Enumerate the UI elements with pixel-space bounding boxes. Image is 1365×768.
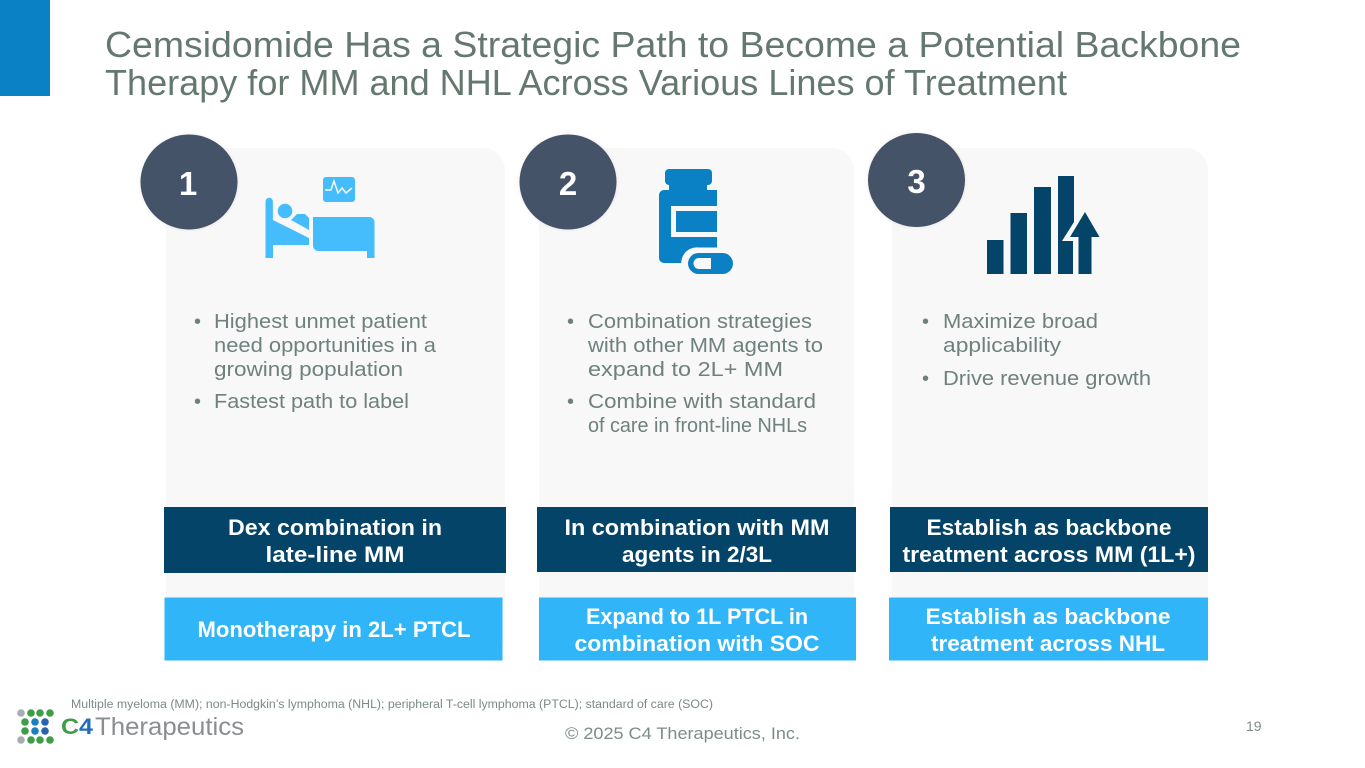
bullet text 1: • [194, 311, 201, 333]
bullet text 3: applicability [943, 335, 1061, 357]
bullet text 1: • [194, 391, 201, 413]
dark band 3: Establish as backbone [926, 515, 1172, 540]
number badge 1: 1 [179, 165, 197, 202]
dark band 3 [890, 507, 1208, 572]
logo: C4 Therapeutics [17, 709, 244, 744]
page number: 19 [1246, 718, 1262, 734]
bullet text 1 [194, 311, 437, 413]
dark band 3: treatment across MM (1L+) [902, 542, 1196, 567]
bullet text 3: Maximize broad [943, 311, 1098, 333]
bullet text 3 [922, 311, 1151, 390]
light band 2: combination with SOC [574, 631, 820, 656]
light band 2 [539, 598, 856, 660]
corner accent block [0, 0, 50, 96]
number badge 2: 2 [559, 165, 577, 202]
bullet text 1: growing population [214, 359, 403, 381]
icon: pill bottle [659, 169, 738, 282]
title: Cemsidomide Has a Strategic Path to Become a Potential Backbone [105, 24, 1241, 65]
number badge 2 [520, 134, 616, 230]
bullet text 1: need opportunities in a [214, 335, 437, 357]
dark band 2 [537, 507, 856, 572]
copyright: © 2025 C4 Therapeutics, Inc. [565, 725, 800, 743]
bullet text 2: Combine with standard [588, 391, 816, 413]
dark band 2: In combination with MM [564, 515, 830, 540]
panel: column 2 [520, 134, 856, 660]
logo wordmark: Therapeutics [95, 713, 244, 741]
dark band 1: late-line MM [266, 542, 404, 567]
bullet text 2: of care in front-line NHLs [588, 415, 807, 437]
light band 1: Monotherapy in 2L+ PTCL [198, 617, 471, 642]
icon: patient in bed with monitor [266, 177, 374, 258]
logo wordmark: C4 [61, 714, 94, 739]
panel: column 3 [868, 133, 1208, 660]
icon: rising bars with arrow [987, 176, 1100, 274]
title [105, 24, 1241, 103]
dark band 1 [164, 507, 506, 573]
panel background 1 [166, 148, 505, 660]
bullet text 2: Combination strategies [588, 311, 812, 333]
dark band 1: Dex combination in [228, 515, 442, 540]
bullet text 1: Highest unmet patient [214, 311, 427, 333]
light band 3: treatment across NHL [931, 631, 1165, 656]
number badge 1 [140, 134, 238, 230]
title: Therapy for MM and NHL Across Various Lines of Treatment [105, 62, 1067, 103]
bullet text 3: • [922, 368, 929, 390]
light band 2: Expand to 1L PTCL in [586, 604, 808, 629]
light band 1 [164, 598, 502, 660]
bullet text 2: expand to 2L+ MM [588, 359, 783, 381]
bullet text 2: • [567, 391, 574, 413]
bullet text 1: Fastest path to label [214, 391, 409, 413]
light band 3: Establish as backbone [926, 604, 1170, 629]
dark band 2: agents in 2/3L [622, 542, 772, 567]
bullet text 2 [567, 311, 823, 437]
bullet text 2: with other MM agents to [587, 335, 823, 357]
number badge 3: 3 [907, 163, 926, 200]
number badge 3 [868, 133, 965, 227]
footnote: Multiple myeloma (MM); non-Hodgkin’s lymphoma (NHL); peripheral T-cell lymphoma (PTCL); standard of care (SOC) [71, 699, 713, 711]
logo dots [17, 709, 54, 744]
light band 3 [889, 598, 1208, 660]
panel background 2 [539, 148, 854, 660]
bullet text 2: • [567, 311, 574, 333]
bullet text 3: • [922, 311, 929, 333]
panel background 3 [892, 148, 1208, 660]
panel: column 1 [140, 134, 506, 660]
bullet text 3: Drive revenue growth [943, 368, 1151, 390]
